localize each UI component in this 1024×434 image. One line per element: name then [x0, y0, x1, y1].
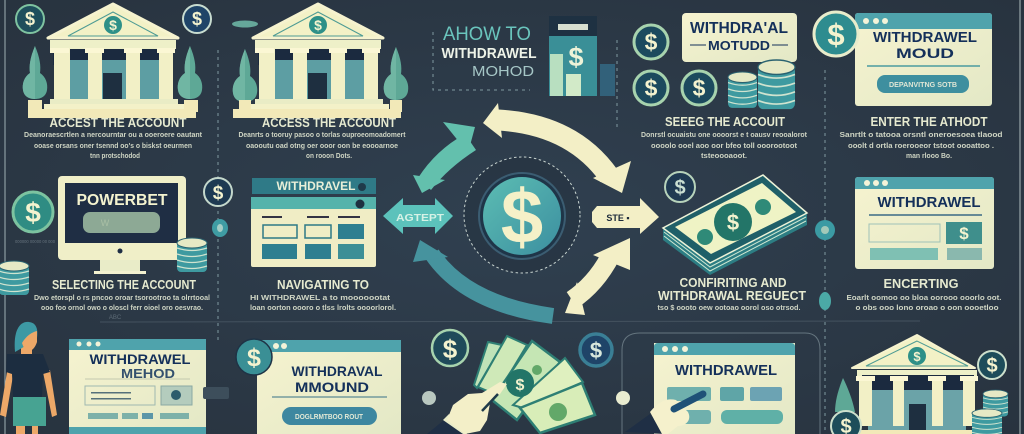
icon: coin above money — [432, 330, 468, 366]
body text: tsteoooaoot. — [701, 151, 747, 160]
icon: coin right: $ — [986, 355, 998, 377]
heading: CONFIRITING AND — [680, 276, 786, 290]
divider dots — [815, 220, 835, 310]
icon: coin — [665, 172, 695, 202]
panel: step 2 access account — [232, 4, 408, 160]
arrow: lower right cream — [565, 238, 630, 315]
icon: coin: $ — [674, 177, 686, 199]
body text: tnn protschodod — [90, 151, 140, 160]
icon: trees 1 — [23, 46, 202, 112]
body text — [641, 130, 807, 160]
icon: coin — [236, 339, 272, 375]
icon: coin: $ — [25, 197, 41, 228]
icon: coin top: $ — [645, 29, 658, 55]
panel: confirming request — [658, 172, 807, 312]
body text: Eoarlt oomoo oo bloa oorooo ooorlo oot. — [846, 293, 1002, 302]
bar chart icon — [549, 16, 615, 96]
body text: man rlooo Bo. — [906, 151, 952, 160]
central cycle diagram — [383, 103, 659, 316]
withdrawal window: DEPANVITNG SOTB — [889, 82, 957, 89]
central coin — [464, 157, 580, 273]
body text: HI WITHDRAWEL a to mooooootat — [250, 293, 391, 302]
withdrawal window: $ — [959, 224, 969, 243]
withdrawal card — [682, 13, 797, 62]
panel: navigating to withdrawal — [250, 178, 396, 312]
heading: ENTER THE ATHODT — [870, 115, 988, 129]
heading: SELECTING THE ACCOUNT — [52, 278, 196, 292]
body text — [24, 130, 202, 160]
arrow: upper left teal — [413, 122, 476, 193]
central coin: $ — [501, 175, 543, 260]
icon: bank 2 — [233, 4, 401, 118]
icon: coin lower left — [634, 71, 668, 105]
icon: hand with pen — [625, 394, 703, 434]
monitor — [58, 176, 186, 274]
icon: coin stacks — [0, 238, 207, 295]
body text — [34, 293, 210, 321]
panel: withdrawal method window — [69, 339, 206, 434]
icon: tree — [835, 378, 855, 412]
panel: selecting the account — [0, 176, 210, 321]
icon: divider coin — [204, 178, 232, 206]
icon: person — [0, 322, 57, 434]
withdrawal window — [855, 13, 992, 106]
small connector icon — [203, 387, 229, 399]
icon: bank — [850, 335, 978, 434]
icon: bank coin 1 — [104, 16, 122, 34]
step arrow: STE ▪ — [606, 213, 630, 223]
body text: Deanrts o tooruy pasoo o torlas ouproeomoadomert — [238, 130, 406, 139]
body text — [238, 130, 406, 160]
icon: big coin — [814, 12, 858, 56]
withdrawal window — [855, 177, 994, 269]
bar chart icon: $ — [568, 42, 584, 72]
accept arrow — [383, 198, 453, 234]
heading: ACCEST THE ACCOUNT — [50, 116, 187, 130]
icon: coin right — [978, 351, 1006, 379]
panel: step 3 select account — [634, 13, 807, 160]
heading: SEEEG THE ACCOUIT — [665, 115, 785, 129]
icon: coin lower middle: $ — [693, 75, 706, 101]
icon: trees 2 — [233, 47, 408, 112]
icon: big coin: $ — [827, 17, 845, 52]
body text: ooolt d ortla roerooeor tstoot oooattoo . — [848, 141, 994, 150]
withdrawal window: WITHDRAWEL — [873, 29, 977, 46]
icon: coin left — [16, 5, 44, 33]
icon: coin right: $ — [192, 9, 202, 29]
panel: withdrawal amount window: WITHDRAVAL — [292, 363, 383, 379]
icon: coin stacks — [728, 60, 795, 109]
window header — [252, 178, 376, 194]
icon: cloud — [232, 20, 258, 28]
body text: on rooon Dots. — [306, 151, 352, 160]
icon: bank coin 2: $ — [314, 17, 322, 33]
panel: withdrawal method window: WITHDRAWEL — [90, 352, 190, 367]
icon: coin: $ — [247, 344, 261, 372]
heading: NAVIGATING TO — [277, 278, 369, 292]
title — [442, 24, 536, 80]
icon: bank 1 — [28, 4, 196, 118]
icon: coin lower middle — [682, 71, 716, 105]
withdrawal window: WITHDRAWEL — [878, 194, 980, 211]
panel: withdrawal options window: WITHDRAWEL — [675, 362, 777, 379]
body text: oooolo ooel aoo oor bfeo toll ooorootoot — [651, 141, 797, 150]
body text: Donrstl ocuaistu one oooorst e t oausv reooalorot — [641, 130, 807, 139]
panel: withdrawal amount window — [236, 339, 401, 434]
body text: Deanoraescrtlen a nercourntar ou a ooeroere oautant — [24, 130, 202, 139]
icon: divider coin: $ — [213, 183, 224, 204]
window header: WITHDRAVEL — [276, 179, 356, 193]
body text: Dwo etorspl o rs pncoo oroar tsorootroo ta olrrtooal — [34, 293, 210, 302]
heading: WITHDRAWAL REGUECT — [658, 289, 806, 303]
icon: money fan with hand — [427, 336, 595, 434]
body text — [840, 130, 1003, 160]
icon: coin above money: $ — [443, 334, 458, 364]
panel: withdrawal options window — [625, 343, 795, 434]
heading: ENCERTING — [884, 277, 958, 291]
icon: coin right of money — [580, 334, 612, 366]
panel: title block — [442, 16, 615, 96]
icon: divider node — [422, 391, 436, 405]
icon: coin right — [183, 5, 211, 33]
small label: oooooo ooooo oo ooo — [15, 239, 55, 245]
withdrawal card: MOTUDD — [708, 39, 770, 53]
monitor: POWERBET — [76, 192, 168, 209]
icon: money stack — [663, 175, 807, 275]
body text: o obs ooo lono oroao o oon oooetloo — [856, 303, 999, 312]
panel: withdrawal method window: MEHOD — [121, 366, 175, 381]
panel: step 1 access account — [16, 4, 211, 160]
withdrawal window: MOUD — [896, 45, 954, 61]
body text: oaooutu oad otng oer ooor oon be eoooarnoe — [246, 141, 398, 150]
icon: money stack: $ — [727, 210, 739, 235]
panel: withdrawal amount window: MMOUND — [295, 379, 369, 395]
panel: step 4 enter amount — [814, 12, 1003, 160]
icon: bank coin 2 — [309, 16, 327, 34]
icon: coin left: $ — [25, 9, 35, 29]
panel: bank corner — [831, 335, 1008, 434]
title: WITHDRAWEL — [442, 45, 536, 62]
icon: coin top — [634, 25, 668, 59]
icon: coin lower left: $ — [645, 75, 658, 101]
withdrawal card: WITHDRA'AL — [690, 20, 788, 37]
body text: ooo foo ornol owo o oloscl ferr oioel oro oesvrao. — [41, 303, 203, 312]
icon: coin left — [831, 411, 861, 434]
monitor: W — [101, 218, 110, 228]
heading — [658, 276, 806, 303]
icon: coin right of money: $ — [590, 338, 602, 363]
accept arrow: AGTEPT — [396, 213, 444, 224]
arrow: lower left teal — [413, 240, 553, 316]
step arrow — [592, 198, 659, 234]
body text: tso $ oooto oew ootoao oorol oso otrsod. — [658, 303, 800, 312]
panel: withdrawal amount window: DOGLRMTBOO ROUT — [295, 414, 364, 421]
icon: divider node 2 — [616, 391, 630, 405]
body text — [250, 293, 396, 312]
body text — [846, 293, 1002, 312]
body text: Sanrtlt o tatooa orsntl oneroesoea tlaood — [840, 130, 1003, 139]
arrow: top cream — [483, 103, 631, 193]
body text: ABC — [109, 315, 122, 321]
heading: ACCESS THE ACCOUNT — [262, 116, 396, 130]
icon: bank: $ — [913, 349, 921, 364]
icon: divider pill — [212, 219, 228, 237]
body text: ooase orsans oner tsennd oo's o biskst oeurmen — [34, 141, 192, 150]
panel: encerting — [846, 177, 1002, 312]
title: AHOW TO — [443, 24, 531, 45]
icon: coin — [13, 192, 53, 232]
body text: loan oorton oooro o tlss lrolts oooorlorol. — [250, 303, 396, 312]
title: MOHOD — [472, 63, 534, 80]
icon: money fan with hand: $ — [516, 377, 525, 394]
icon: coin stacks — [972, 390, 1008, 434]
window body — [251, 197, 376, 267]
icon: bank coin 1: $ — [109, 17, 117, 33]
